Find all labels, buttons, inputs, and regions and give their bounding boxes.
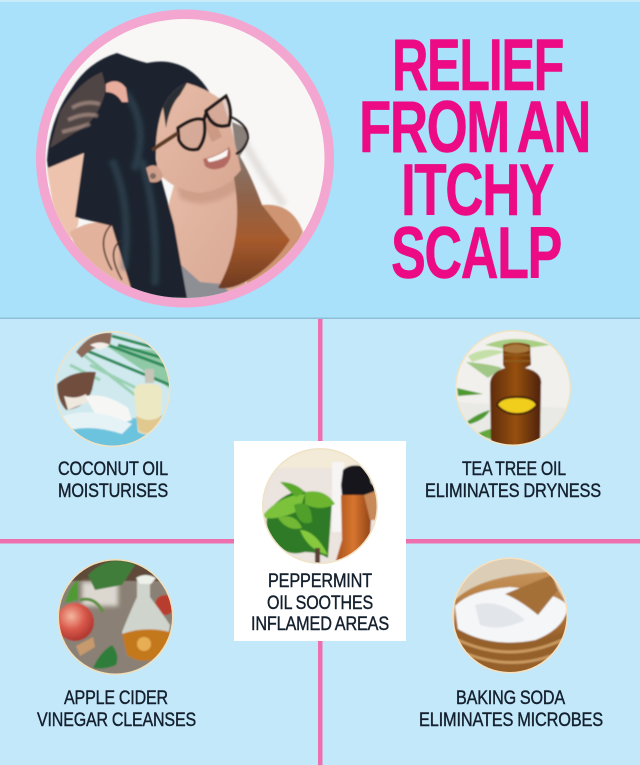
title: ITCHY	[401, 150, 554, 231]
caption: coconut oil: MOISTURISES	[58, 480, 168, 502]
icon: apple cider vinegar photo	[56, 559, 175, 675]
portrait: woman scratching her itchy scalp	[36, 10, 336, 310]
icon: peppermint oil photo	[262, 448, 378, 564]
caption: peppermint oil: OIL SOOTHES	[267, 592, 373, 614]
icon: baking soda photo	[452, 557, 570, 675]
header band	[0, 0, 640, 319]
portrait photo	[46, 19, 324, 298]
title: SCALP	[391, 213, 561, 294]
caption: peppermint oil: INFLAMED AREAS	[251, 613, 389, 635]
icon: coconut oil photo	[54, 331, 172, 447]
portrait pink ring	[36, 10, 334, 308]
caption: apple cider vinegar: APPLE CIDER	[64, 687, 168, 709]
panel: apple cider vinegar	[37, 559, 196, 731]
glasses	[152, 96, 248, 154]
title	[359, 25, 590, 294]
caption: coconut oil: COCONUT OIL	[58, 458, 168, 480]
caption: baking soda: ELIMINATES MICROBES	[419, 709, 603, 731]
icon: tea tree oil photo	[455, 330, 571, 446]
title: RELIEF	[392, 25, 563, 106]
caption: baking soda	[419, 687, 603, 731]
caption: apple cider vinegar	[37, 687, 196, 731]
caption: baking soda: BAKING SODA	[456, 687, 565, 709]
caption: coconut oil	[58, 458, 168, 502]
caption: peppermint oil: PEPPERMINT	[268, 570, 372, 592]
panel: tea tree oil	[425, 330, 601, 502]
panel: baking soda	[419, 557, 603, 731]
panel: coconut oil	[54, 331, 172, 502]
pink cross dividers	[0, 319, 640, 765]
panel: peppermint oil centre card	[234, 441, 406, 641]
caption: peppermint oil	[251, 570, 389, 635]
caption: tea tree oil: ELIMINATES DRYNESS	[425, 480, 601, 502]
caption: apple cider vinegar: VINEGAR CLEANSES	[37, 709, 196, 731]
caption: tea tree oil	[425, 458, 601, 502]
caption: tea tree oil: TEA TREE OIL	[462, 458, 566, 480]
